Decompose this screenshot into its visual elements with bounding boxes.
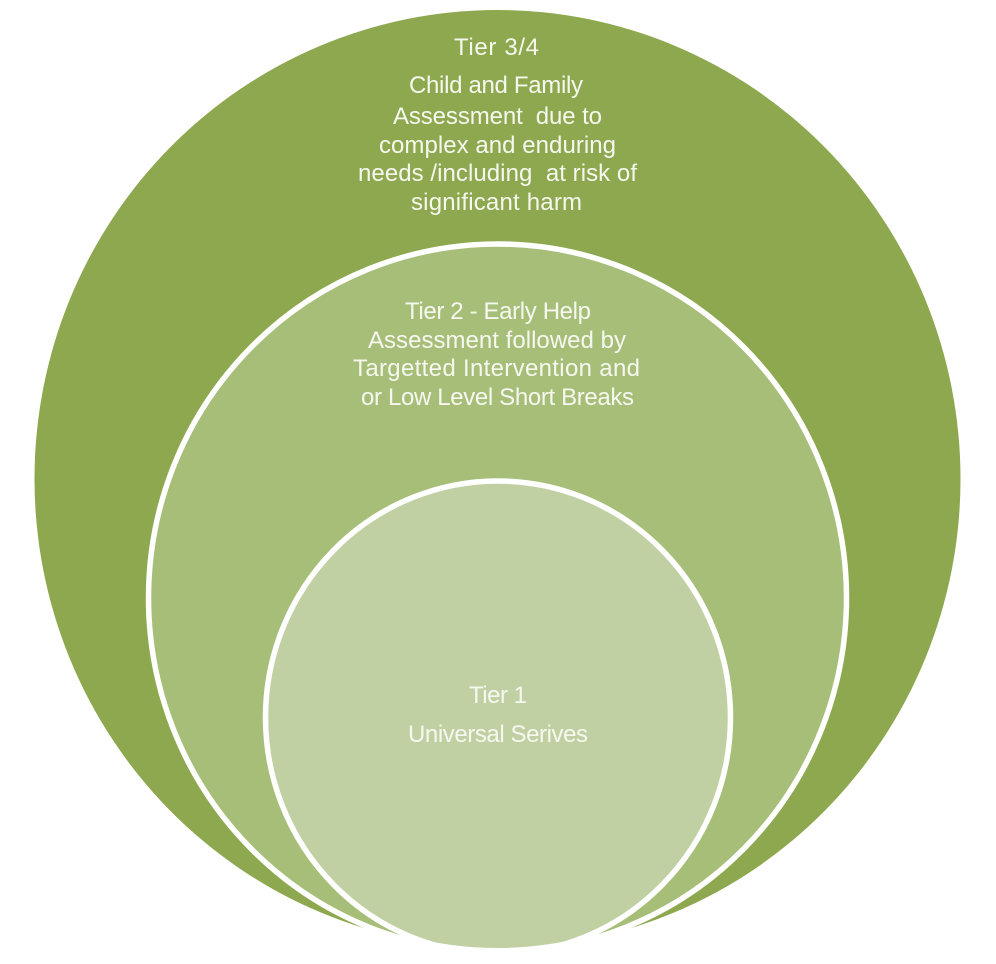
text: tier 3/4 label: significant harm	[411, 189, 582, 216]
text: tier 3/4 label: Assessment due to	[393, 103, 602, 130]
text: tier 2 label: or Low Level Short Breaks	[361, 384, 634, 411]
text: tier 1 label: Tier 1	[469, 682, 527, 709]
text: tier 3/4 label	[358, 34, 637, 216]
text: tier 2 label: Tier 2 - Early Help	[405, 298, 591, 325]
text: tier 2 label: Assessment followed by	[368, 327, 626, 354]
text: tier 2 label	[353, 298, 640, 411]
text: tier 2 label: Targetted Intervention and	[353, 355, 640, 382]
text: tier 3/4 label: Tier 3/4	[454, 34, 539, 61]
text: tier 1 label: Universal Serives	[408, 721, 588, 748]
panel: tier 1 inner circle	[266, 481, 730, 964]
text: tier 3/4 label: needs /including at risk of	[358, 160, 637, 187]
text: tier 3/4 label: complex and enduring	[379, 132, 616, 159]
text: tier 3/4 label: Child and Family	[409, 72, 583, 99]
panel: tier 2 middle circle	[148, 244, 846, 952]
text: tier 1 label	[408, 682, 588, 748]
